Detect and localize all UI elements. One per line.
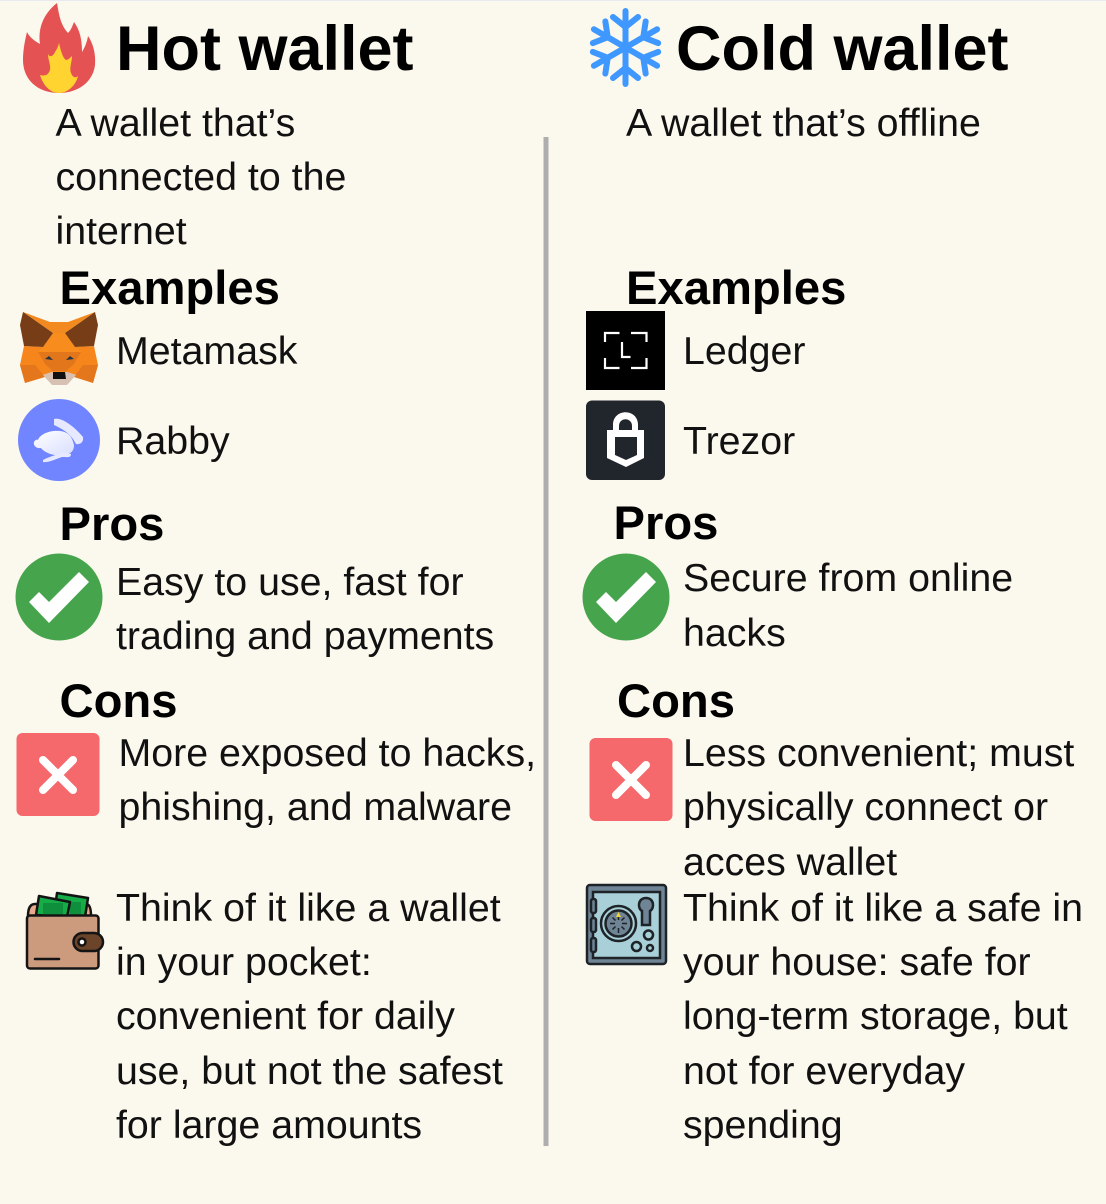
text: cold analogy: long-term storage, but — [683, 994, 1068, 1038]
text: hot pros body: Easy to use, fast for — [116, 560, 464, 604]
icon: Trezor — [586, 400, 665, 480]
heading: cold examples: Examples — [626, 262, 846, 315]
text: hot cons body: More exposed to hacks, — [118, 731, 536, 775]
heading: cold cons: Cons — [617, 675, 735, 728]
icon: cross — [16, 733, 100, 816]
icon: check — [582, 554, 670, 640]
icon: cross — [590, 738, 672, 821]
text: cold pros body: hacks — [683, 611, 786, 655]
icon: safe — [587, 885, 666, 964]
heading: Cold wallet: Cold wallet — [676, 14, 1009, 84]
icon: Metamask fox — [20, 312, 98, 385]
text: cold cons body: acces wallet — [683, 840, 897, 884]
heading: hot examples: Examples — [60, 262, 280, 315]
heading: Hot wallet: Hot wallet — [116, 14, 414, 84]
text: hot analogy: in your pocket: — [116, 940, 372, 984]
icon: wallet — [27, 893, 103, 968]
label: Rabby: Rabby — [116, 419, 230, 463]
heading: hot cons: Cons — [60, 675, 177, 728]
text: hot pros body: trading and payments — [116, 614, 494, 658]
label: Metamask: Metamask — [116, 329, 298, 373]
icon: Rabby — [18, 399, 100, 481]
icon: flame — [23, 3, 95, 93]
heading: hot pros: Pros — [60, 498, 164, 551]
text: cold analogy: not for everyday — [683, 1049, 965, 1093]
text: cold wallet definition: A wallet that’s offline — [626, 101, 981, 145]
text: cold cons body: Less convenient; must — [683, 731, 1074, 775]
icon: snowflake — [588, 11, 663, 84]
text: cold analogy: spending — [683, 1103, 843, 1147]
text: cold pros body: Secure from online — [683, 556, 1013, 600]
label: Ledger: Ledger — [683, 329, 805, 373]
text: cold analogy: Think of it like a safe in — [683, 886, 1083, 930]
icon: check — [16, 554, 102, 640]
text: hot wallet definition: connected to the — [56, 155, 346, 199]
text: hot analogy: use, but not the safest — [116, 1049, 503, 1093]
text: hot analogy: Think of it like a wallet — [116, 886, 501, 930]
text: hot wallet definition: internet — [56, 209, 187, 253]
text: cold cons body: physically connect or — [683, 785, 1048, 829]
text: hot cons body: phishing, and malware — [118, 785, 512, 829]
text: hot wallet definition: A wallet that’s — [56, 101, 295, 145]
text: hot analogy: for large amounts — [116, 1103, 422, 1147]
heading: cold pros: Pros — [614, 497, 718, 550]
text: hot analogy: convenient for daily — [116, 994, 455, 1038]
icon: Ledger — [586, 311, 665, 390]
text: cold analogy: your house: safe for — [683, 940, 1031, 984]
label: Trezor: Trezor — [683, 419, 795, 463]
